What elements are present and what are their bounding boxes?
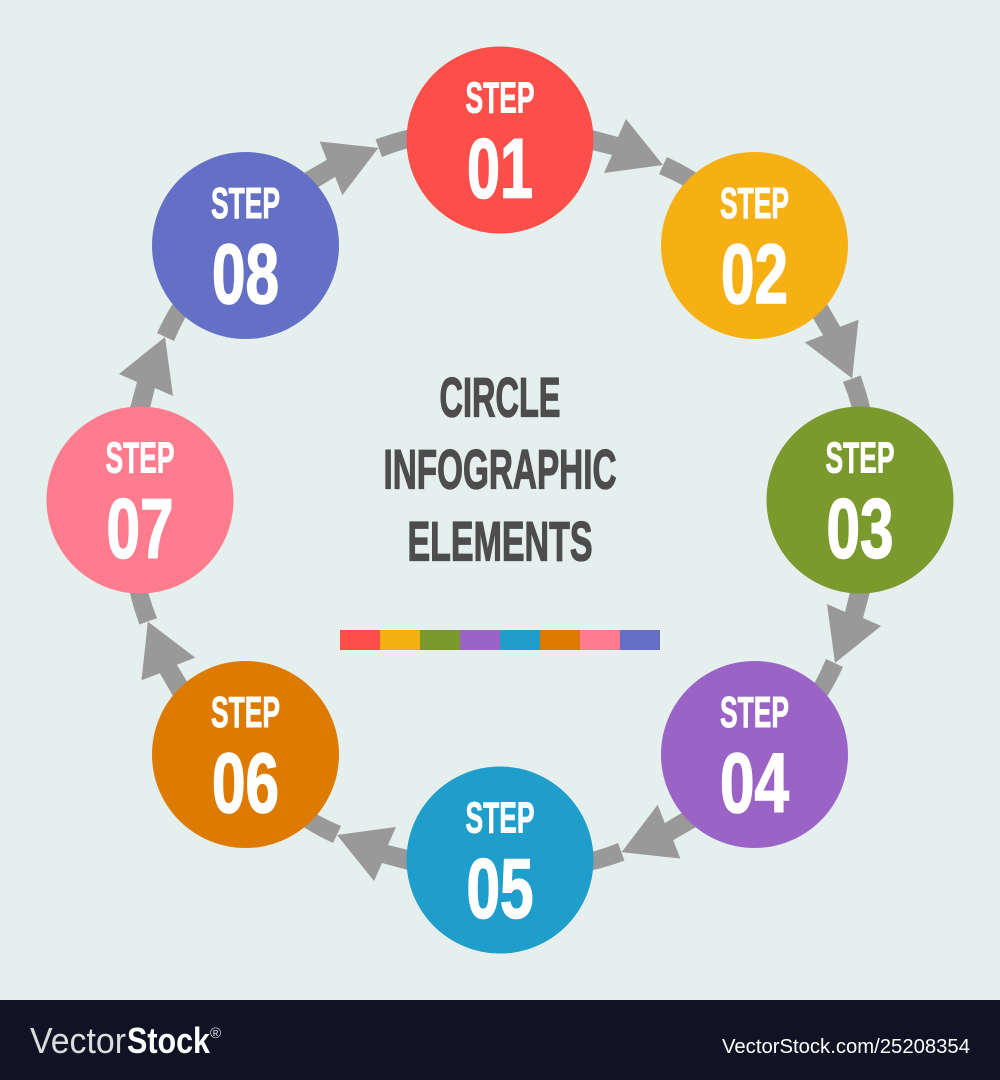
step 01 circle	[406, 46, 594, 234]
step 07 circle: 07	[106, 482, 174, 576]
step 05 circle: STEP	[466, 794, 534, 842]
step 07 circle	[46, 406, 234, 594]
step 02 circle: 02	[721, 227, 788, 321]
step 08 circle: 08	[212, 227, 279, 321]
step 03 circle: 03	[826, 482, 894, 576]
step 08 circle	[152, 152, 339, 339]
arrow: step 7 to step 8	[119, 295, 196, 418]
step 06 circle	[152, 661, 339, 848]
step 01 circle: 01	[467, 122, 533, 216]
step 07 circle: STEP	[106, 434, 174, 482]
colour legend bar	[340, 630, 660, 650]
step 03 circle: STEP	[826, 434, 894, 482]
title: CIRCLE	[440, 366, 560, 428]
title: INFOGRAPHIC	[384, 438, 616, 500]
arrow: step 3 to step 4	[804, 582, 881, 705]
step 03 circle	[766, 406, 954, 594]
step 02 circle	[661, 152, 848, 339]
step 04 circle: 04	[720, 736, 789, 830]
step 02 circle: STEP	[720, 179, 789, 228]
arrow: step 5 to step 6	[295, 804, 418, 881]
title: ELEMENTS	[408, 510, 592, 572]
step 06 circle: STEP	[211, 688, 280, 737]
footer logo: Vector	[30, 1020, 126, 1061]
title	[384, 366, 616, 572]
arrow: step 2 to step 3	[773, 289, 914, 430]
step 04 circle: STEP	[720, 688, 789, 737]
step 04 circle	[661, 661, 848, 848]
footer logo: Stock	[127, 1020, 211, 1061]
footer logo	[30, 1020, 221, 1061]
footer bar	[0, 1000, 1000, 1080]
footer logo: ®	[210, 1025, 221, 1042]
step 05 circle	[406, 766, 594, 954]
arrow: step 4 to step 5	[570, 773, 711, 914]
step 01 circle: STEP	[466, 74, 534, 122]
arrow: step 6 to step 7	[86, 570, 227, 711]
step 05 circle: 05	[466, 842, 534, 936]
step 08 circle: STEP	[211, 179, 280, 228]
step 06 circle: 06	[212, 736, 279, 830]
arrow: step 8 to step 1	[289, 86, 430, 227]
footer image id: VectorStock.com/25208354	[722, 1036, 970, 1058]
arrow: step 1 to step 2	[582, 119, 705, 196]
